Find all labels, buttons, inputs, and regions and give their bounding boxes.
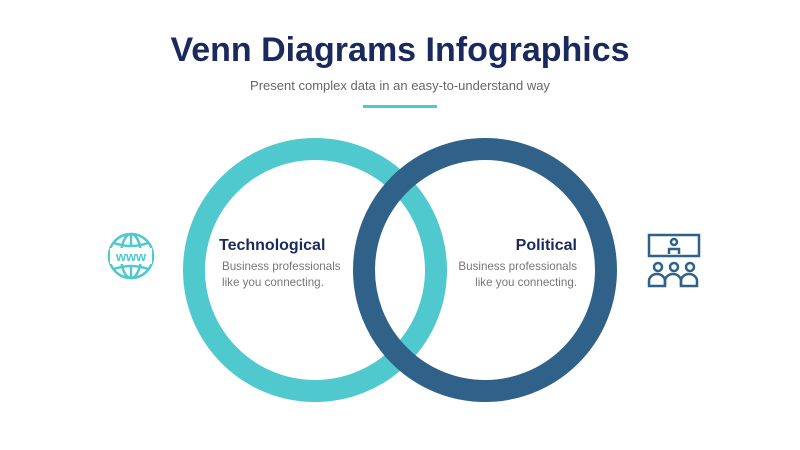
title: Venn Diagrams Infographics	[170, 31, 630, 69]
text: political	[458, 237, 577, 289]
accent line	[363, 105, 437, 108]
text: political: Business professionals	[458, 260, 577, 273]
icon: www globe	[108, 232, 154, 280]
icon: presentation audience	[648, 234, 700, 288]
icon: www globe: www	[115, 249, 147, 264]
text: technological: like you connecting.	[222, 276, 324, 289]
subtitle: Present complex data in an easy-to-understand way	[250, 78, 550, 93]
text: technological: Business professionals	[222, 260, 341, 273]
text: political: Political	[516, 237, 577, 254]
text: political: like you connecting.	[475, 276, 577, 289]
text: technological	[219, 237, 341, 289]
text: technological: Technological	[219, 237, 325, 254]
